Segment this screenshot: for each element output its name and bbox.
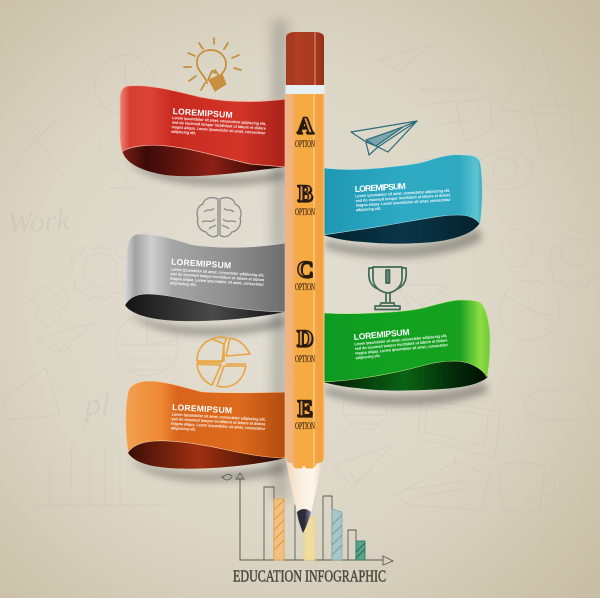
text: option D: LOREMIPSUM [353, 327, 410, 342]
text: option B: Lorem ipsumdolor sit amet, consectetur adipiscing elit, [355, 188, 450, 198]
letter B: B [298, 182, 313, 207]
text: option A: adipiscing elit. [171, 129, 196, 135]
letter C: C [297, 258, 314, 283]
letter D: D [297, 326, 313, 351]
ribbon inner fold [128, 430, 285, 469]
text: option B: adipiscing elit. [356, 206, 381, 212]
letter D [295, 326, 315, 365]
panel: option E orange ribbon [126, 381, 285, 481]
bar chart sketch [222, 473, 393, 565]
letter B [295, 181, 315, 218]
letter C: OPTION [295, 283, 315, 293]
letter D: OPTION [295, 355, 315, 365]
text: option B: LOREMIPSUM [355, 181, 406, 194]
letter E: OPTION [295, 422, 315, 432]
text: option D: Lorem ipsumdolor sit amet, consectetur adipiscing elit, [354, 333, 447, 346]
icon: paper plane [351, 121, 417, 155]
letter A: A [298, 114, 315, 139]
text: option E: magna aliqua. Lorem ipsumdolor sit amet, consectetur [171, 421, 266, 431]
ribbon front [120, 86, 285, 167]
letter E: E [297, 396, 313, 421]
background doodles: pl [83, 386, 110, 422]
pencil [285, 32, 324, 533]
pencil barrel [285, 94, 324, 469]
text: option E: sed do eiusmod tempor incididunt ut labore et dolore [171, 416, 266, 427]
text: option C: LOREMIPSUM [171, 257, 231, 270]
text: option C: magna aliqua. Lorem ipsumdolor sit amet, consectetur [170, 276, 264, 287]
text: option C: adipiscing elit. [170, 280, 197, 287]
text: option E: Lorem ipsumdolor sit amet, consectetur adipiscing elit, [172, 411, 266, 422]
letter E [295, 396, 315, 432]
letter E: E [298, 397, 313, 422]
letter B: OPTION [295, 208, 315, 218]
text: option D: adipiscing elit. [355, 353, 381, 360]
pencil wood cone [285, 452, 323, 513]
letter A [295, 113, 315, 150]
ribbon front [125, 234, 285, 312]
pencil shadow [272, 20, 288, 500]
pencil eraser [286, 32, 324, 85]
background doodles: Work [7, 204, 71, 240]
text: option B: magna aliqua. Lorem ipsumdolor sit amet, consectetur [356, 197, 451, 208]
text: option C: sed do eiusmod tempor incididunt ut labore et dolore [170, 271, 265, 282]
background doodles: management [420, 83, 477, 95]
text: option B [355, 178, 452, 212]
text: option D: sed do eiusmod tempor incididunt ut labore et dolore [355, 337, 448, 351]
panel: option D green ribbon [323, 300, 490, 406]
icon: brain [197, 198, 241, 237]
panel: option A red ribbon [120, 86, 285, 185]
text: option C: Lorem ipsumdolor sit amet, consectetur adipiscing elit, [171, 266, 265, 278]
text: option C [170, 257, 266, 292]
panel: option C gray ribbon [125, 234, 285, 335]
letter A: A [297, 113, 314, 138]
text: option E: LOREMIPSUM [172, 402, 232, 415]
letter C [295, 257, 315, 293]
ribbon inner fold [125, 285, 285, 321]
ribbon inner fold [323, 210, 480, 244]
text: option A: magna aliqua. Lorem ipsumdolor sit amet, consectetur [171, 124, 266, 135]
pencil ferrule band [286, 85, 324, 94]
letter A: OPTION [295, 140, 315, 150]
text: option A [171, 106, 267, 140]
ribbon inner fold [323, 355, 488, 391]
text: option B: sed do eiusmod tempor incididunt ut labore et dolore [355, 192, 451, 203]
ribbon inner fold [122, 140, 285, 176]
icon: light bulb [184, 38, 241, 91]
ribbon front [323, 155, 482, 235]
text: option E [171, 402, 267, 436]
text: option D [353, 323, 449, 360]
text: option E: adipiscing elit. [171, 425, 196, 432]
title: EDUCATION INFOGRAPHIC [233, 566, 386, 586]
text: option A: sed do eiusmod tempor incididunt ut labore et dolore [172, 120, 267, 131]
text: option D: magna aliqua. Lorem ipsumdolor sit amet, consectetur [355, 342, 448, 356]
text: option A: LOREMIPSUM [172, 106, 233, 120]
letter D: D [297, 327, 314, 352]
text: option A: Lorem ipsumdolor sit amet, consectetur adipiscing elit, [172, 115, 266, 126]
ribbon front [323, 300, 490, 382]
pencil lead [297, 509, 311, 533]
icon: trophy [369, 267, 406, 310]
letter B: B [297, 181, 313, 206]
icon: pie chart [197, 337, 250, 387]
ribbon front [126, 381, 285, 458]
letter C: C [297, 257, 313, 282]
panel: option B blue ribbon [323, 155, 482, 258]
background doodles [3, 40, 600, 512]
